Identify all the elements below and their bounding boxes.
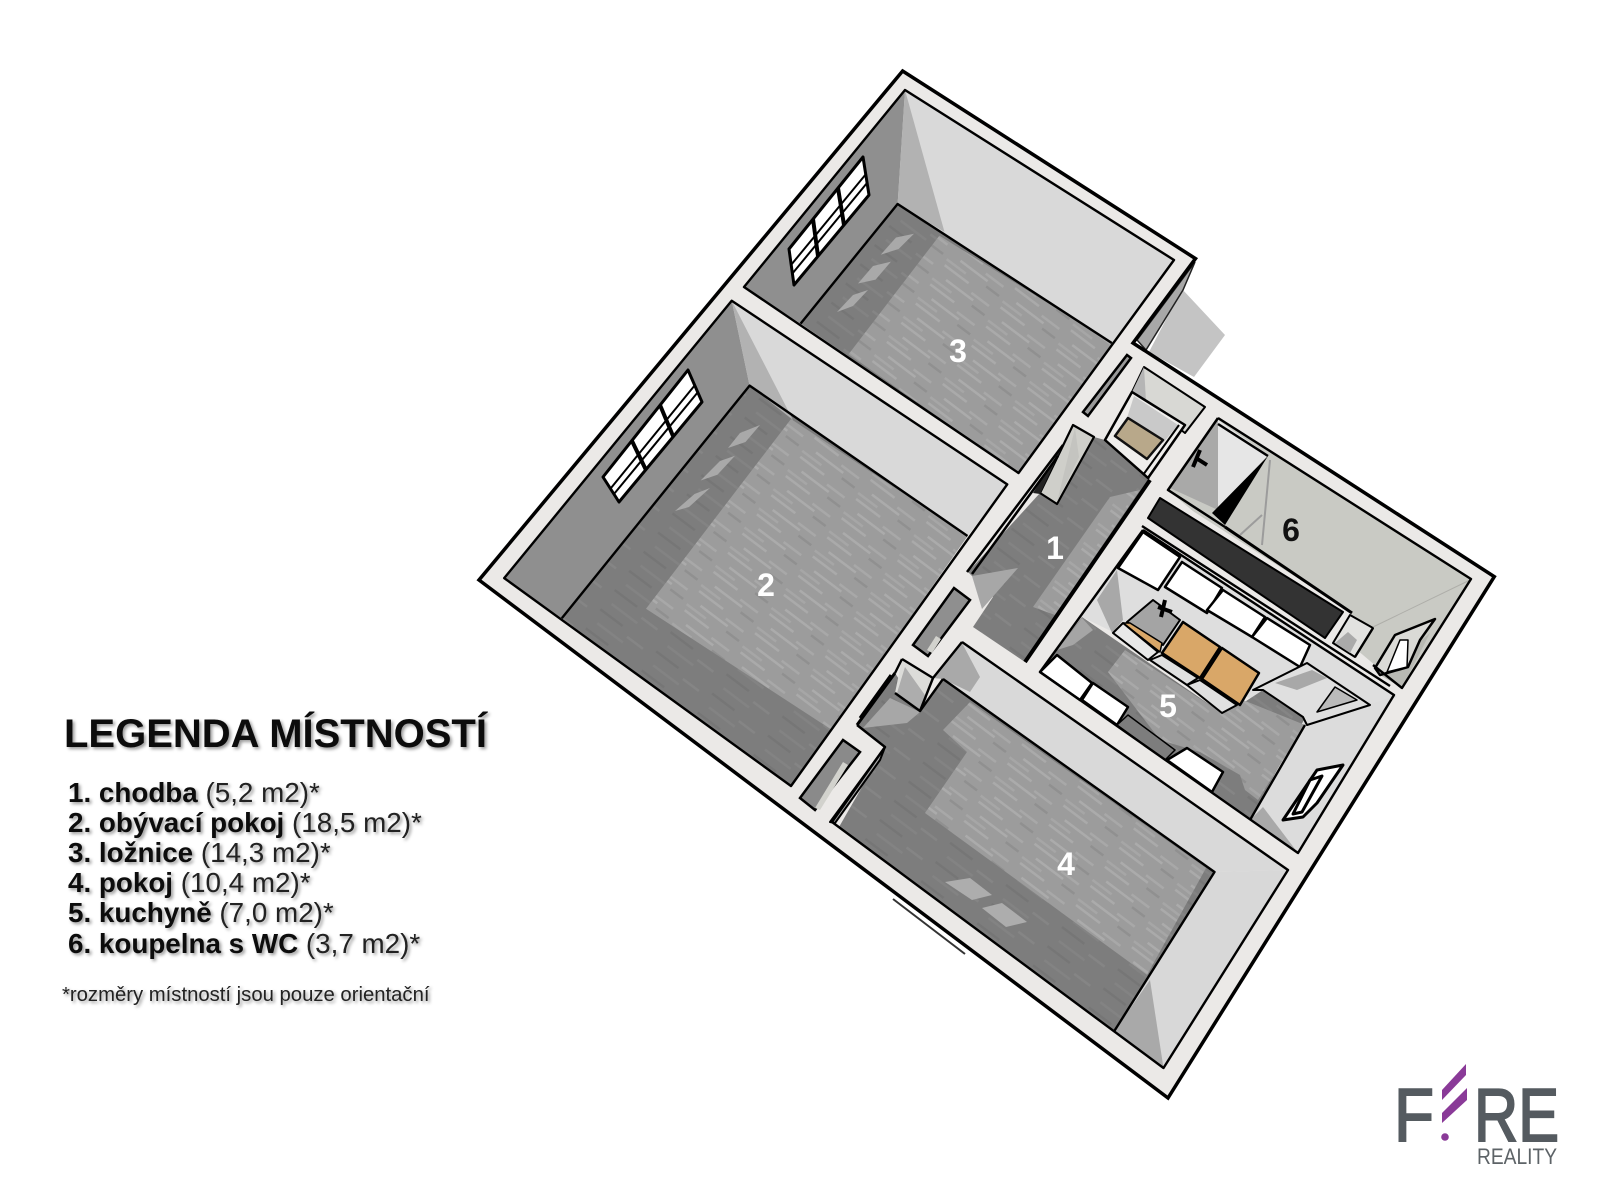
number 1: 1 bbox=[1046, 530, 1064, 566]
worktop middle bbox=[1162, 622, 1220, 678]
door leaf room 1 bbox=[967, 445, 1063, 574]
back wall kitchen bbox=[1082, 530, 1397, 725]
wall block shade bbox=[1057, 428, 1079, 502]
thin niche bbox=[1083, 355, 1131, 416]
room 1: hallway bbox=[967, 367, 1205, 662]
worktop left bbox=[1123, 623, 1162, 652]
number 2: 2 bbox=[757, 567, 775, 603]
cabinet front middle bbox=[1150, 655, 1198, 685]
floor kitchen bbox=[1040, 617, 1305, 820]
lit floor room 1 bbox=[1033, 490, 1140, 615]
room 4: room bbox=[830, 642, 1288, 1068]
stove bbox=[1117, 715, 1175, 760]
logo letters RE: RE bbox=[1474, 1073, 1559, 1157]
wall corner shade room 2 bbox=[732, 301, 793, 420]
shower light wall bbox=[1218, 420, 1268, 510]
outline room 6 bbox=[1218, 418, 1471, 688]
sink bbox=[1127, 600, 1180, 645]
wall shade room 4 bbox=[933, 643, 980, 692]
legend row 6: 6. koupelna s WC (3,7 m2)* bbox=[68, 928, 420, 959]
legend row 3: 3. ložnice (14,3 m2)* bbox=[68, 837, 331, 868]
entrance door bbox=[1105, 392, 1185, 478]
room 3: bedroom bbox=[744, 90, 1174, 473]
wall line room 1 bbox=[1025, 480, 1150, 662]
door panel bbox=[1127, 396, 1178, 443]
outline room 4 bbox=[832, 642, 1288, 1068]
closet wall shade bbox=[897, 667, 927, 711]
window room 2 bbox=[603, 370, 702, 502]
window room 6 bbox=[1375, 619, 1435, 675]
lit floor room 2 bbox=[646, 419, 968, 730]
shower outline bbox=[1168, 418, 1268, 527]
wall niches bbox=[800, 355, 1131, 810]
window light patches room 2 bbox=[675, 425, 760, 511]
left wall room 3 bbox=[744, 90, 905, 324]
legend row 4: 4. pokoj (10,4 m2)* bbox=[68, 867, 311, 898]
small box bbox=[1333, 615, 1373, 657]
outer walls bbox=[479, 71, 1494, 1098]
box shade bbox=[1335, 632, 1357, 653]
legend bbox=[62, 712, 491, 1008]
window kitchen bbox=[1283, 765, 1343, 820]
footnote: *rozměry místností jsou pouze orientační bbox=[62, 984, 429, 1006]
floor room 4 bbox=[839, 673, 1214, 1032]
lit floor corner kitchen bbox=[1057, 618, 1093, 650]
shower glass door bbox=[1212, 456, 1268, 525]
corner shade room 4 bbox=[1114, 980, 1164, 1068]
shower back wall bbox=[1170, 420, 1218, 510]
upper wall room 4 bbox=[943, 642, 1288, 872]
cabinet front left bbox=[1113, 623, 1158, 660]
door frame kitchen bbox=[1317, 687, 1357, 712]
door shade kitchen bbox=[1275, 670, 1327, 690]
outline room 3 bbox=[744, 90, 1174, 473]
lit floor room 4 bbox=[925, 702, 1206, 975]
outline kitchen bbox=[1040, 526, 1394, 853]
number 5: 5 bbox=[1159, 688, 1177, 724]
line along bathroom floor bbox=[1225, 527, 1352, 613]
left wall room 2 bbox=[504, 301, 750, 618]
door room 4 bbox=[857, 673, 895, 725]
cabinet front right bbox=[1187, 680, 1237, 713]
side wall room 4 bbox=[830, 747, 885, 823]
exterior wall strip bbox=[1137, 262, 1195, 350]
room numbers bbox=[757, 333, 1300, 882]
number 3: 3 bbox=[949, 333, 967, 369]
room 5: kitchen bbox=[1040, 526, 1397, 853]
door frame line bbox=[1143, 425, 1179, 475]
wall shade kitchen bbox=[1097, 570, 1123, 633]
window light patches room 3 bbox=[837, 234, 914, 312]
door mat bbox=[1115, 418, 1163, 459]
logo exclamation mark bbox=[1441, 1064, 1467, 1141]
number 6: 6 bbox=[1282, 512, 1300, 548]
window pane room 6 bbox=[1387, 640, 1408, 672]
window light patches room 4 bbox=[945, 878, 1027, 927]
legend row 2: 2. obývací pokoj (18,5 m2)* bbox=[68, 807, 422, 838]
niche upper inner light bbox=[927, 636, 941, 653]
closet wall room 4 bbox=[895, 659, 933, 711]
legend row 5: 5. kuchyně (7,0 m2)* bbox=[68, 897, 334, 928]
cast shadow bbox=[1149, 289, 1225, 377]
open door room 1 bbox=[1033, 445, 1063, 494]
room 6: bathroom bbox=[1146, 418, 1471, 688]
floor room 3 bbox=[801, 204, 1112, 473]
shower frame lines bbox=[1240, 460, 1270, 545]
corner shade room 6 bbox=[1380, 633, 1430, 688]
legend title: LEGENDA MÍSTNOSTÍ bbox=[64, 712, 487, 756]
exterior window room 4 bbox=[893, 899, 965, 954]
upper cabinets bbox=[1118, 532, 1310, 667]
lit floor kitchen bbox=[1108, 650, 1305, 800]
lit floor patch room 1 bbox=[972, 568, 1018, 609]
wall block room 1 bbox=[1040, 425, 1094, 504]
corner shade kitchen bbox=[1250, 807, 1298, 853]
tap bbox=[1158, 600, 1172, 617]
number 4: 4 bbox=[1057, 846, 1075, 882]
floor room 1 bbox=[968, 437, 1150, 662]
worktop right bbox=[1202, 648, 1259, 705]
room 2: living room bbox=[504, 301, 1007, 786]
shower tap bbox=[1193, 450, 1207, 467]
lower cabinets bbox=[1040, 655, 1223, 792]
bathroom lower wall bbox=[1146, 490, 1352, 645]
upper niche bbox=[913, 588, 970, 656]
right wall room 4 bbox=[1114, 870, 1288, 1068]
upper wall room 3 bbox=[898, 90, 1174, 343]
outline room 2 bbox=[504, 301, 1007, 786]
right wall kitchen bbox=[1250, 697, 1392, 853]
lit floor room 3 bbox=[849, 236, 1112, 473]
window room 3 bbox=[789, 157, 869, 285]
legend row 1: 1. chodba (5,2 m2)* bbox=[68, 777, 320, 808]
lit floor patch room 4 bbox=[863, 698, 920, 728]
black bar bbox=[1148, 498, 1343, 638]
floor room 2 bbox=[562, 386, 968, 786]
logo: FIRE Reality bbox=[1394, 1064, 1559, 1169]
far wall shade bbox=[1132, 367, 1146, 401]
lower niche inner light bbox=[815, 762, 848, 810]
upper wall room 2 bbox=[732, 301, 1007, 536]
surface room 6 bbox=[1168, 418, 1471, 688]
far wall room 1 bbox=[1132, 367, 1205, 433]
lower niche bbox=[800, 740, 860, 810]
logo word REALITY: REALITY bbox=[1477, 1144, 1557, 1169]
wall corner shade room 3 bbox=[898, 90, 944, 232]
open door kitchen bbox=[1253, 663, 1370, 725]
logo letter F: F bbox=[1394, 1073, 1434, 1157]
corner line room 6 bbox=[1373, 580, 1470, 627]
